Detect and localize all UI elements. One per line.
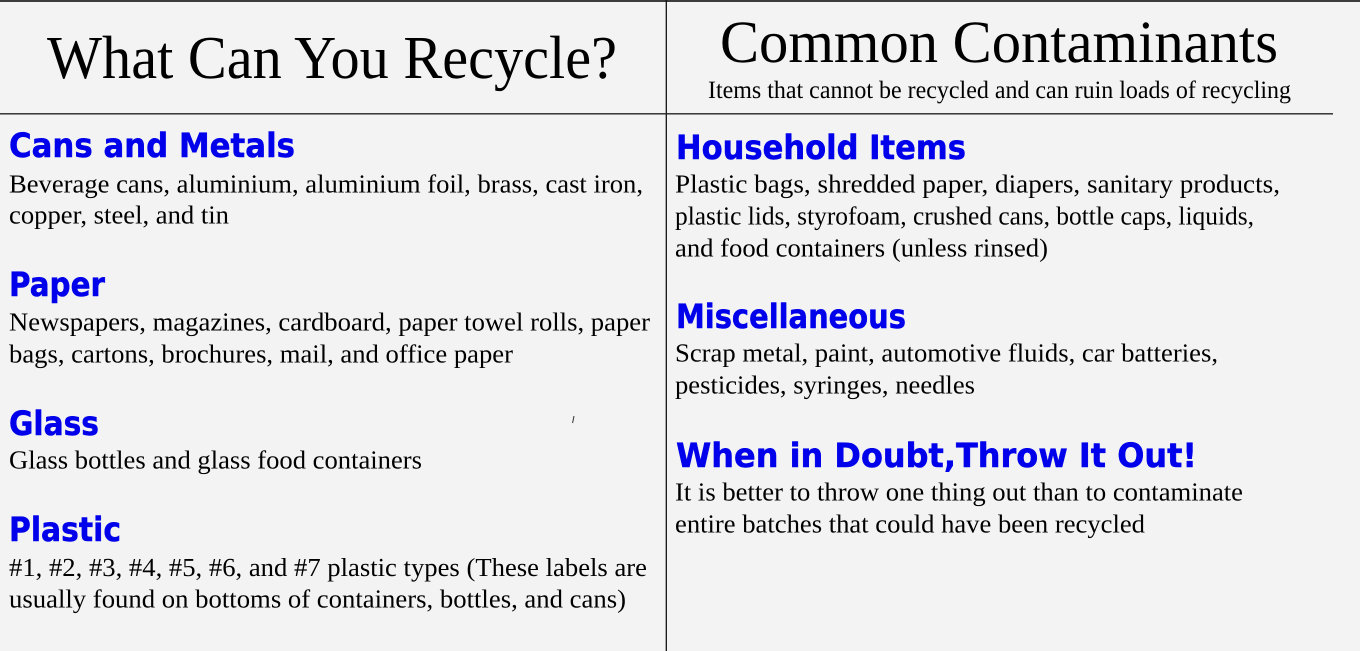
- section: when in doubt: entire batches that could have been recycled: [675, 510, 1145, 538]
- section: miscellaneous: [675, 297, 1218, 400]
- section: when in doubt: [675, 436, 1243, 538]
- section: plastic: [9, 510, 647, 614]
- section: glass: Glass bottles and glass food containers: [9, 446, 422, 474]
- section: household items: plastic lids, styrofoam, crushed cans, bottle caps, liquids,: [675, 202, 1254, 230]
- section: paper: bags, cartons, brochures, mail, and office paper: [9, 340, 513, 368]
- section: plastic: usually found on bottoms of containers, bottles, and cans): [9, 584, 626, 614]
- section: household items: and food containers (unless rinsed): [675, 234, 1048, 262]
- section: glass: [9, 404, 422, 474]
- section: plastic: #1, #2, #3, #4, #5, #6, and #7 plastic types (These labels are: [9, 553, 647, 582]
- section: when in doubt: It is better to throw one thing out than to contaminate: [675, 478, 1243, 506]
- title: common contaminants: Common Contaminants: [720, 9, 1278, 75]
- panel: what can you recycle: [9, 25, 650, 614]
- section: when in doubt: When in Doubt,Throw It Out!: [676, 436, 1197, 475]
- panel: common contaminants: [675, 9, 1291, 538]
- section: paper: Paper: [9, 265, 105, 304]
- section: household items: [675, 128, 1280, 262]
- title: what can you recycle: What Can You Recycle?: [47, 25, 617, 92]
- section: household items: Plastic bags, shredded paper, diapers, sanitary products,: [675, 170, 1280, 198]
- section: cans and metals: [9, 126, 643, 230]
- section: plastic: Plastic: [9, 510, 121, 549]
- section: cans and metals: copper, steel, and tin: [9, 200, 229, 230]
- section: miscellaneous: pesticides, syringes, needles: [675, 370, 975, 400]
- section: glass: Glass: [9, 404, 99, 443]
- section: cans and metals: Cans and Metals: [9, 126, 295, 165]
- section: paper: Newspapers, magazines, cardboard, paper towel rolls, paper: [9, 308, 650, 336]
- section: miscellaneous: Miscellaneous: [676, 297, 906, 336]
- section: cans and metals: Beverage cans, aluminium, aluminium foil, brass, cast iron,: [9, 170, 643, 198]
- subtitle: Items that cannot be recycled and can ruin loads of recycling: [708, 77, 1291, 104]
- section: paper: [9, 265, 650, 368]
- section: miscellaneous: Scrap metal, paint, automotive fluids, car batteries,: [675, 338, 1218, 368]
- section: household items: Household Items: [676, 128, 966, 167]
